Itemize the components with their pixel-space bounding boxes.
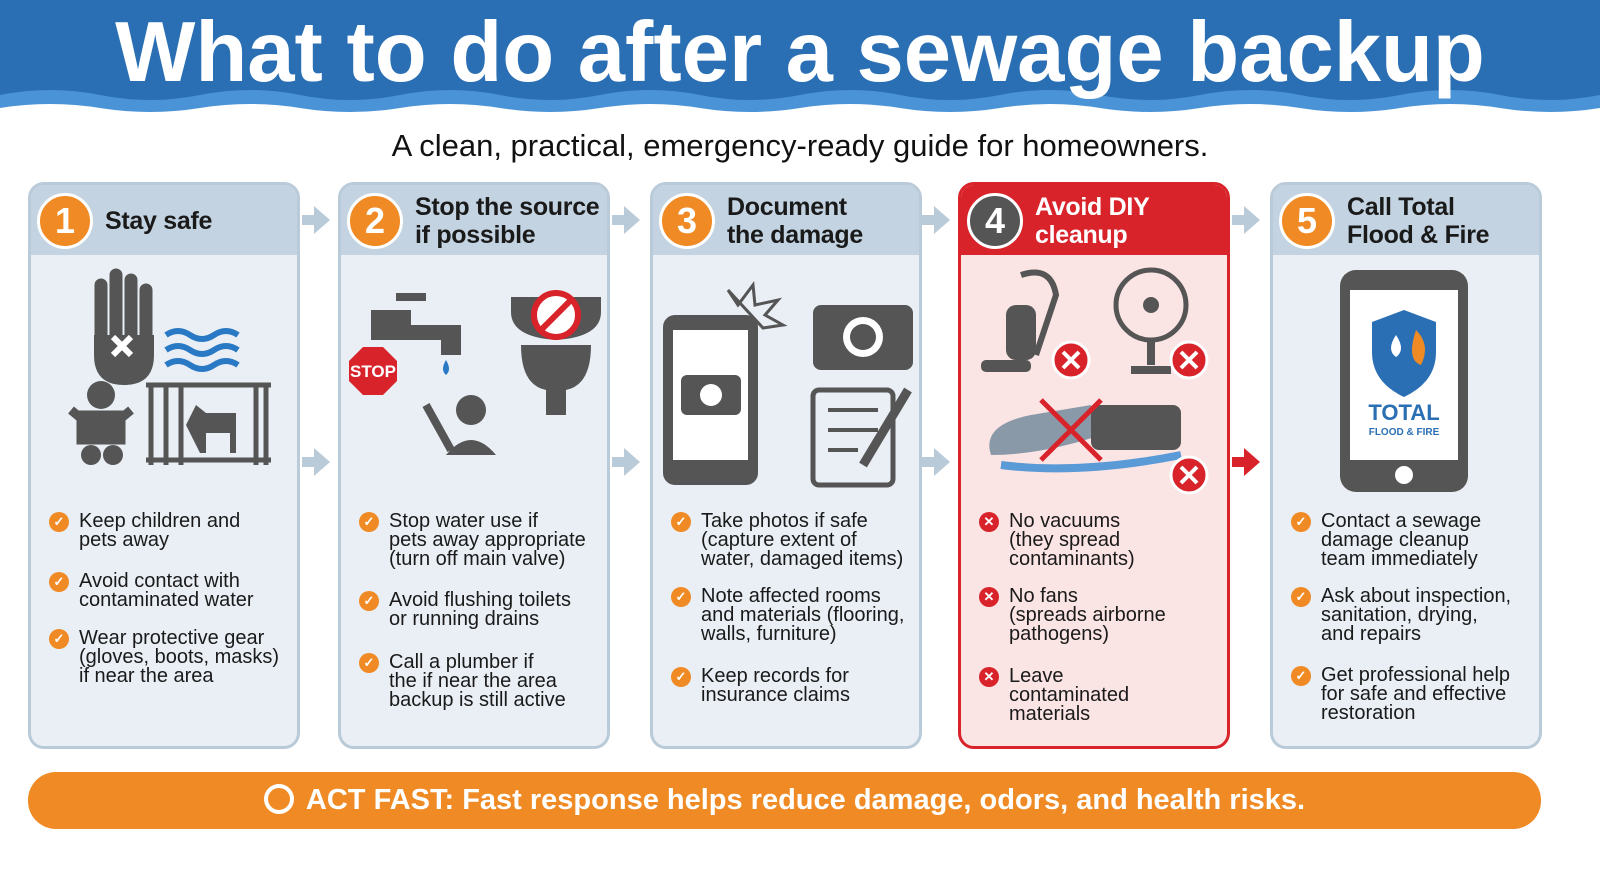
callout: act fast bar	[28, 772, 1541, 829]
panel: 4 avoid DIY cleanup: contaminants)	[1009, 548, 1135, 570]
icon: phone, camera, notepad	[663, 281, 913, 488]
panel: 2 stop the source: 2	[365, 200, 385, 241]
panel: 1 stay safe: pets away	[79, 529, 169, 551]
panel: 2 stop the source: Call a plumber if	[389, 651, 534, 673]
panel: 3 document the damage: the damage	[727, 221, 863, 249]
panel: 3 document the damage: walls, furniture)	[701, 623, 837, 645]
panel: 2 stop the source	[338, 182, 610, 749]
panel: 5 call total flood & fire: sanitation, drying,	[1321, 604, 1478, 626]
panel: 5 call total flood & fire	[1270, 182, 1542, 749]
icon: faucet, stop sign, toilet, plumber	[349, 290, 601, 455]
panel: 1 stay safe: Keep children and	[79, 510, 240, 532]
panel: 2 stop the source: (turn off main valve)	[389, 548, 565, 570]
panel: 5 call total flood & fire: damage cleanup	[1321, 529, 1469, 551]
panel: 5 call total flood & fire: 5	[1297, 200, 1317, 241]
panel: 3 document the damage: insurance claims	[701, 684, 850, 706]
icon: hand, water, child, pet	[68, 268, 271, 465]
arrows between panels	[302, 206, 1260, 476]
panel: 5 call total flood & fire: for safe and effective	[1321, 683, 1506, 705]
icon: vacuum, fan, wet materials	[981, 268, 1208, 494]
panel: 2 stop the source: backup is still active	[389, 689, 566, 711]
panel: 4 avoid DIY cleanup: contaminated	[1009, 684, 1129, 706]
panel: 3 document the damage: water, damaged items)	[701, 548, 903, 570]
panel: 3 document the damage: 3	[677, 200, 697, 241]
panel: 1 stay safe	[28, 182, 300, 749]
panel: 3 document the damage: and materials (flooring,	[701, 604, 904, 626]
panel: 4 avoid DIY cleanup: No fans	[1009, 585, 1078, 607]
panel: 1 stay safe: Avoid contact with	[79, 570, 240, 592]
panel: 4 avoid DIY cleanup: 4	[985, 200, 1005, 241]
panel: 3 document the damage: Keep records for	[701, 665, 849, 687]
panel: 5 call total flood & fire: restoration	[1321, 702, 1416, 724]
icon: faucet, stop sign, toilet, plumber: STOP	[350, 362, 396, 381]
panel: 3 document the damage: Take photos if safe	[701, 510, 868, 532]
callout: act fast bar: ACT FAST: Fast response helps reduce damage, odors, and health risks.	[306, 784, 1305, 816]
panel: 1 stay safe: Stay safe	[105, 207, 212, 235]
panel: 1 stay safe: (gloves, boots, masks)	[79, 646, 279, 668]
panel: 1 stay safe: Wear protective gear	[79, 627, 264, 649]
panel: 5 call total flood & fire: and repairs	[1321, 623, 1421, 645]
panel: 2 stop the source: pets away appropriate	[389, 529, 586, 551]
panel: 1 stay safe: contaminated water	[79, 589, 254, 611]
panel: 4 avoid DIY cleanup: No vacuums	[1009, 510, 1120, 532]
panel: 4 avoid DIY cleanup: cleanup	[1035, 221, 1127, 249]
title: What to do after a sewage backup	[115, 5, 1485, 100]
panel: 4 avoid DIY cleanup: (they spread	[1009, 529, 1120, 551]
panel: 5 call total flood & fire: team immediately	[1321, 548, 1478, 570]
panel: 4 avoid DIY cleanup	[958, 182, 1230, 749]
panel: 5 call total flood & fire: Ask about inspection,	[1321, 585, 1511, 607]
panel: 5 call total flood & fire: Flood & Fire	[1347, 221, 1489, 249]
panel: 3 document the damage	[650, 182, 922, 749]
panel: 4 avoid DIY cleanup: pathogens)	[1009, 623, 1109, 645]
panel: 5 call total flood & fire: Call Total	[1347, 193, 1455, 221]
panel: 3 document the damage: Document	[727, 193, 847, 221]
panel: 4 avoid DIY cleanup: (spreads airborne	[1009, 604, 1166, 626]
panel: 2 stop the source: Stop water use if	[389, 510, 538, 532]
panel: 2 stop the source: or running drains	[389, 608, 539, 630]
panel: 1 stay safe: 1	[55, 200, 75, 241]
icon: phone with logo: FLOOD & FIRE	[1369, 427, 1440, 438]
panel: 2 stop the source: Stop the source	[415, 193, 599, 221]
icon: phone with logo: TOTAL	[1368, 400, 1440, 425]
header band	[0, 0, 1600, 120]
panel: 4 avoid DIY cleanup: materials	[1009, 703, 1090, 725]
panel: 2 stop the source: the if near the area	[389, 670, 557, 692]
subtitle: A clean, practical, emergency-ready guide for homeowners.	[392, 128, 1208, 163]
panel: 2 stop the source: Avoid flushing toilets	[389, 589, 571, 611]
panel: 3 document the damage: (capture extent of	[701, 529, 857, 551]
panel: 5 call total flood & fire: Get professional help	[1321, 664, 1510, 686]
panel: 4 avoid DIY cleanup: Avoid DIY	[1035, 193, 1149, 221]
panel: 5 call total flood & fire: Contact a sewage	[1321, 510, 1481, 532]
panel: 1 stay safe: if near the area	[79, 665, 214, 687]
panel: 2 stop the source: if possible	[415, 221, 535, 249]
panel: 3 document the damage: Note affected rooms	[701, 585, 881, 607]
panel: 4 avoid DIY cleanup: Leave	[1009, 665, 1064, 687]
icon: phone with logo	[1340, 270, 1468, 492]
